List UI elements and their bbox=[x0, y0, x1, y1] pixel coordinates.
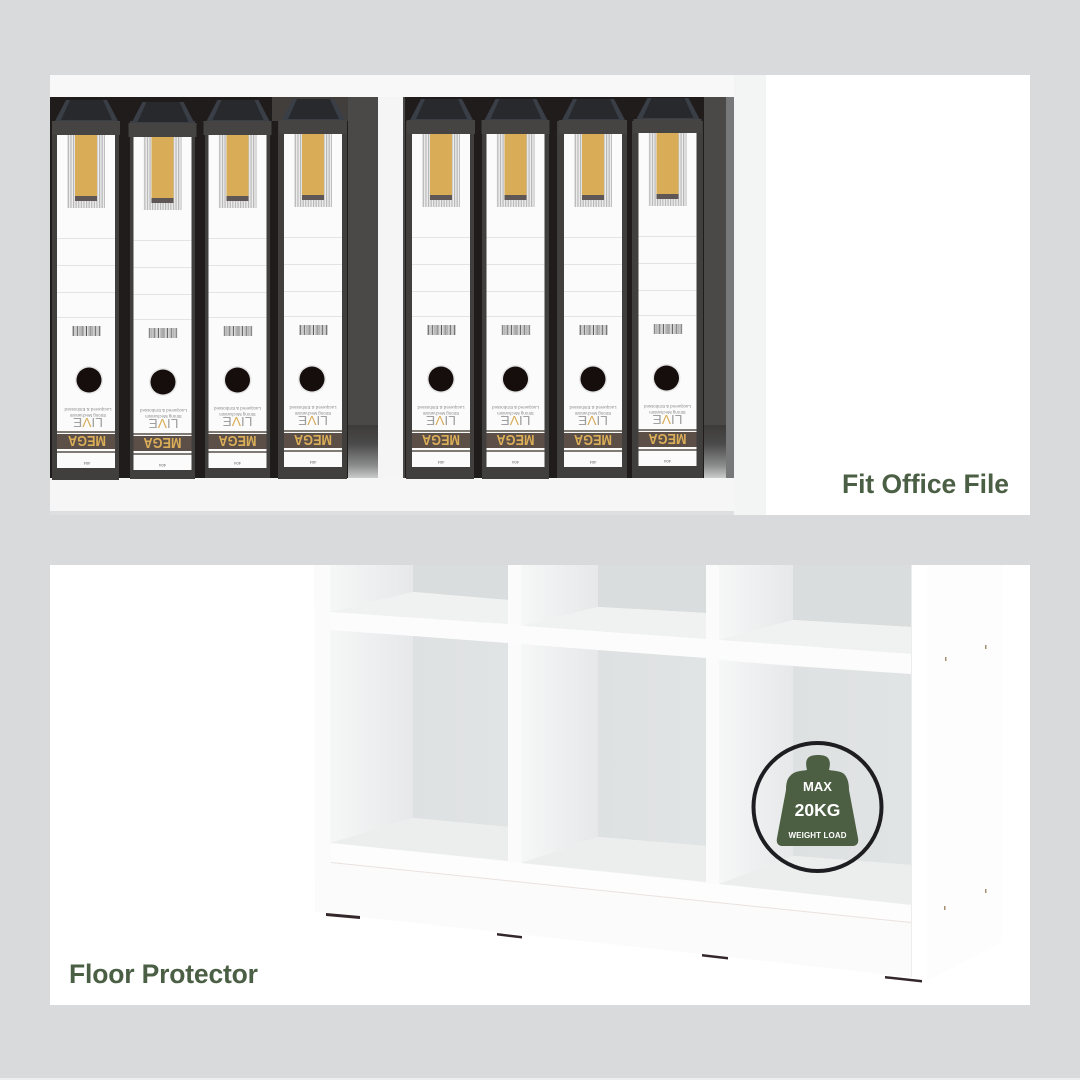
binder 1 spine text: 404 bbox=[83, 461, 90, 466]
binder 3 spine text: 404 bbox=[233, 461, 241, 466]
binder 8 spine text bbox=[644, 404, 691, 464]
shelf centre divider bbox=[378, 97, 403, 479]
binder 6 bbox=[482, 99, 550, 479]
bottom shelf front edge bbox=[331, 843, 911, 922]
binder 7 spine text: LIVE bbox=[578, 413, 608, 428]
binder 7 spine text: Strong Mechanism bbox=[574, 411, 611, 416]
binder 3 spine text: LIVE bbox=[222, 414, 253, 429]
binder 1 spine text: Strong Mechanism bbox=[69, 413, 106, 418]
shelf interior back wall bbox=[50, 97, 734, 479]
binder 6 spine text: Strong Mechanism bbox=[497, 411, 534, 416]
binder 2 bbox=[128, 102, 196, 479]
binder 8 spine text: Lacquered & Embossed bbox=[644, 404, 691, 409]
icon: weight bbox=[777, 755, 858, 846]
binder 2 spine text: 404 bbox=[158, 463, 166, 468]
lower cell 3 bbox=[719, 660, 911, 905]
badge: max 20kg weight load bbox=[754, 743, 882, 871]
binder 6 spine text: 404 bbox=[511, 460, 519, 465]
binder 3 bbox=[204, 100, 272, 478]
binder 4 spine text bbox=[289, 405, 336, 465]
side panel bbox=[911, 565, 1002, 981]
binder 6 spine text: MEGA bbox=[496, 431, 534, 448]
binder 1 spine text: MEGA bbox=[68, 432, 106, 449]
panel: fit office file bbox=[50, 75, 1030, 515]
middle shelf front bbox=[330, 612, 911, 673]
heading: floor protector: Floor Protector bbox=[69, 959, 258, 989]
binder 6 spine text: Lacquered & Embossed bbox=[492, 405, 539, 410]
shelf top board bbox=[50, 75, 734, 97]
heading: fit office file: Fit Office File bbox=[842, 469, 1009, 499]
plinth bbox=[315, 862, 911, 976]
binder 5 spine text bbox=[417, 405, 464, 465]
binder 2 spine text bbox=[140, 408, 187, 468]
binder 3 spine text: MEGA bbox=[218, 432, 256, 449]
upper cell 3 bbox=[719, 565, 911, 654]
binder 7 spine text bbox=[569, 405, 616, 465]
binder 4 spine text: Strong Mechanism bbox=[294, 411, 331, 416]
binder 1 bbox=[52, 100, 120, 480]
shelf base fill bbox=[314, 565, 911, 977]
floor protector feet bbox=[326, 913, 922, 982]
lower cell 1 bbox=[330, 630, 508, 861]
binder 5 bbox=[406, 99, 475, 479]
binder 8 spine text: 404 bbox=[663, 459, 671, 464]
binder 7 spine text: MEGA bbox=[574, 431, 612, 448]
binder gap shadows bbox=[50, 97, 734, 479]
shelf unit bbox=[314, 565, 1002, 982]
binder 3 spine text bbox=[214, 406, 261, 466]
badge ring bbox=[754, 743, 882, 871]
badge text: max: MAX bbox=[803, 779, 832, 794]
binder 4 spine text: LIVE bbox=[298, 413, 328, 428]
binder 3 spine text: Lacquered & Embossed bbox=[214, 406, 261, 411]
shelf floor right of right group bbox=[703, 425, 727, 479]
binder 5 spine text: Strong Mechanism bbox=[422, 411, 459, 416]
upper cell 1 bbox=[330, 565, 508, 624]
binder 3 spine text: Strong Mechanism bbox=[219, 412, 256, 417]
binder 7 spine text: Lacquered & Embossed bbox=[569, 405, 616, 410]
binder 4 spine text: MEGA bbox=[294, 431, 332, 448]
binder 4 bbox=[278, 99, 347, 479]
binder 8 spine text: LIVE bbox=[652, 412, 683, 427]
binder 2 spine text: Lacquered & Embossed bbox=[140, 408, 187, 413]
binder 1 spine text bbox=[64, 407, 111, 466]
binder 6 spine text: LIVE bbox=[500, 413, 531, 428]
badge text: 20kg: 20KG bbox=[795, 800, 840, 820]
binder 7 spine text: 404 bbox=[589, 460, 596, 465]
binder 5 spine text: Lacquered & Embossed bbox=[417, 405, 464, 410]
binder 5 spine text: LIVE bbox=[426, 413, 456, 428]
shelf bottom board bbox=[50, 478, 734, 515]
lower cell 2 bbox=[521, 644, 706, 882]
binder 8 bbox=[632, 98, 703, 478]
binder 2 spine text: Strong Mechanism bbox=[145, 414, 182, 419]
binder 8 spine text: MEGA bbox=[648, 430, 686, 447]
badge text: weight load: WEIGHT LOAD bbox=[788, 831, 847, 840]
upper cell 2 bbox=[521, 565, 706, 639]
shelf floor right of left group bbox=[347, 425, 378, 479]
binder 4 spine text: 404 bbox=[309, 460, 316, 465]
binder 2 spine text: LIVE bbox=[148, 416, 179, 431]
binder 4 spine text: Lacquered & Embossed bbox=[289, 405, 336, 410]
binder 1 spine text: LIVE bbox=[73, 415, 103, 430]
shelf side board bbox=[734, 75, 766, 515]
binder 5 spine text: MEGA bbox=[422, 431, 460, 448]
side panel screw holes bbox=[944, 645, 986, 910]
binder 5 spine text: 404 bbox=[437, 460, 444, 465]
binder 7 bbox=[557, 99, 627, 478]
panel: floor protector bbox=[50, 565, 1030, 1005]
binder 1 spine text: Lacquered & Embossed bbox=[64, 407, 111, 412]
binder 2 spine text: MEGA bbox=[143, 434, 182, 451]
binder 8 spine text: Strong Mechanism bbox=[649, 410, 686, 415]
binder 6 spine text bbox=[492, 405, 539, 465]
